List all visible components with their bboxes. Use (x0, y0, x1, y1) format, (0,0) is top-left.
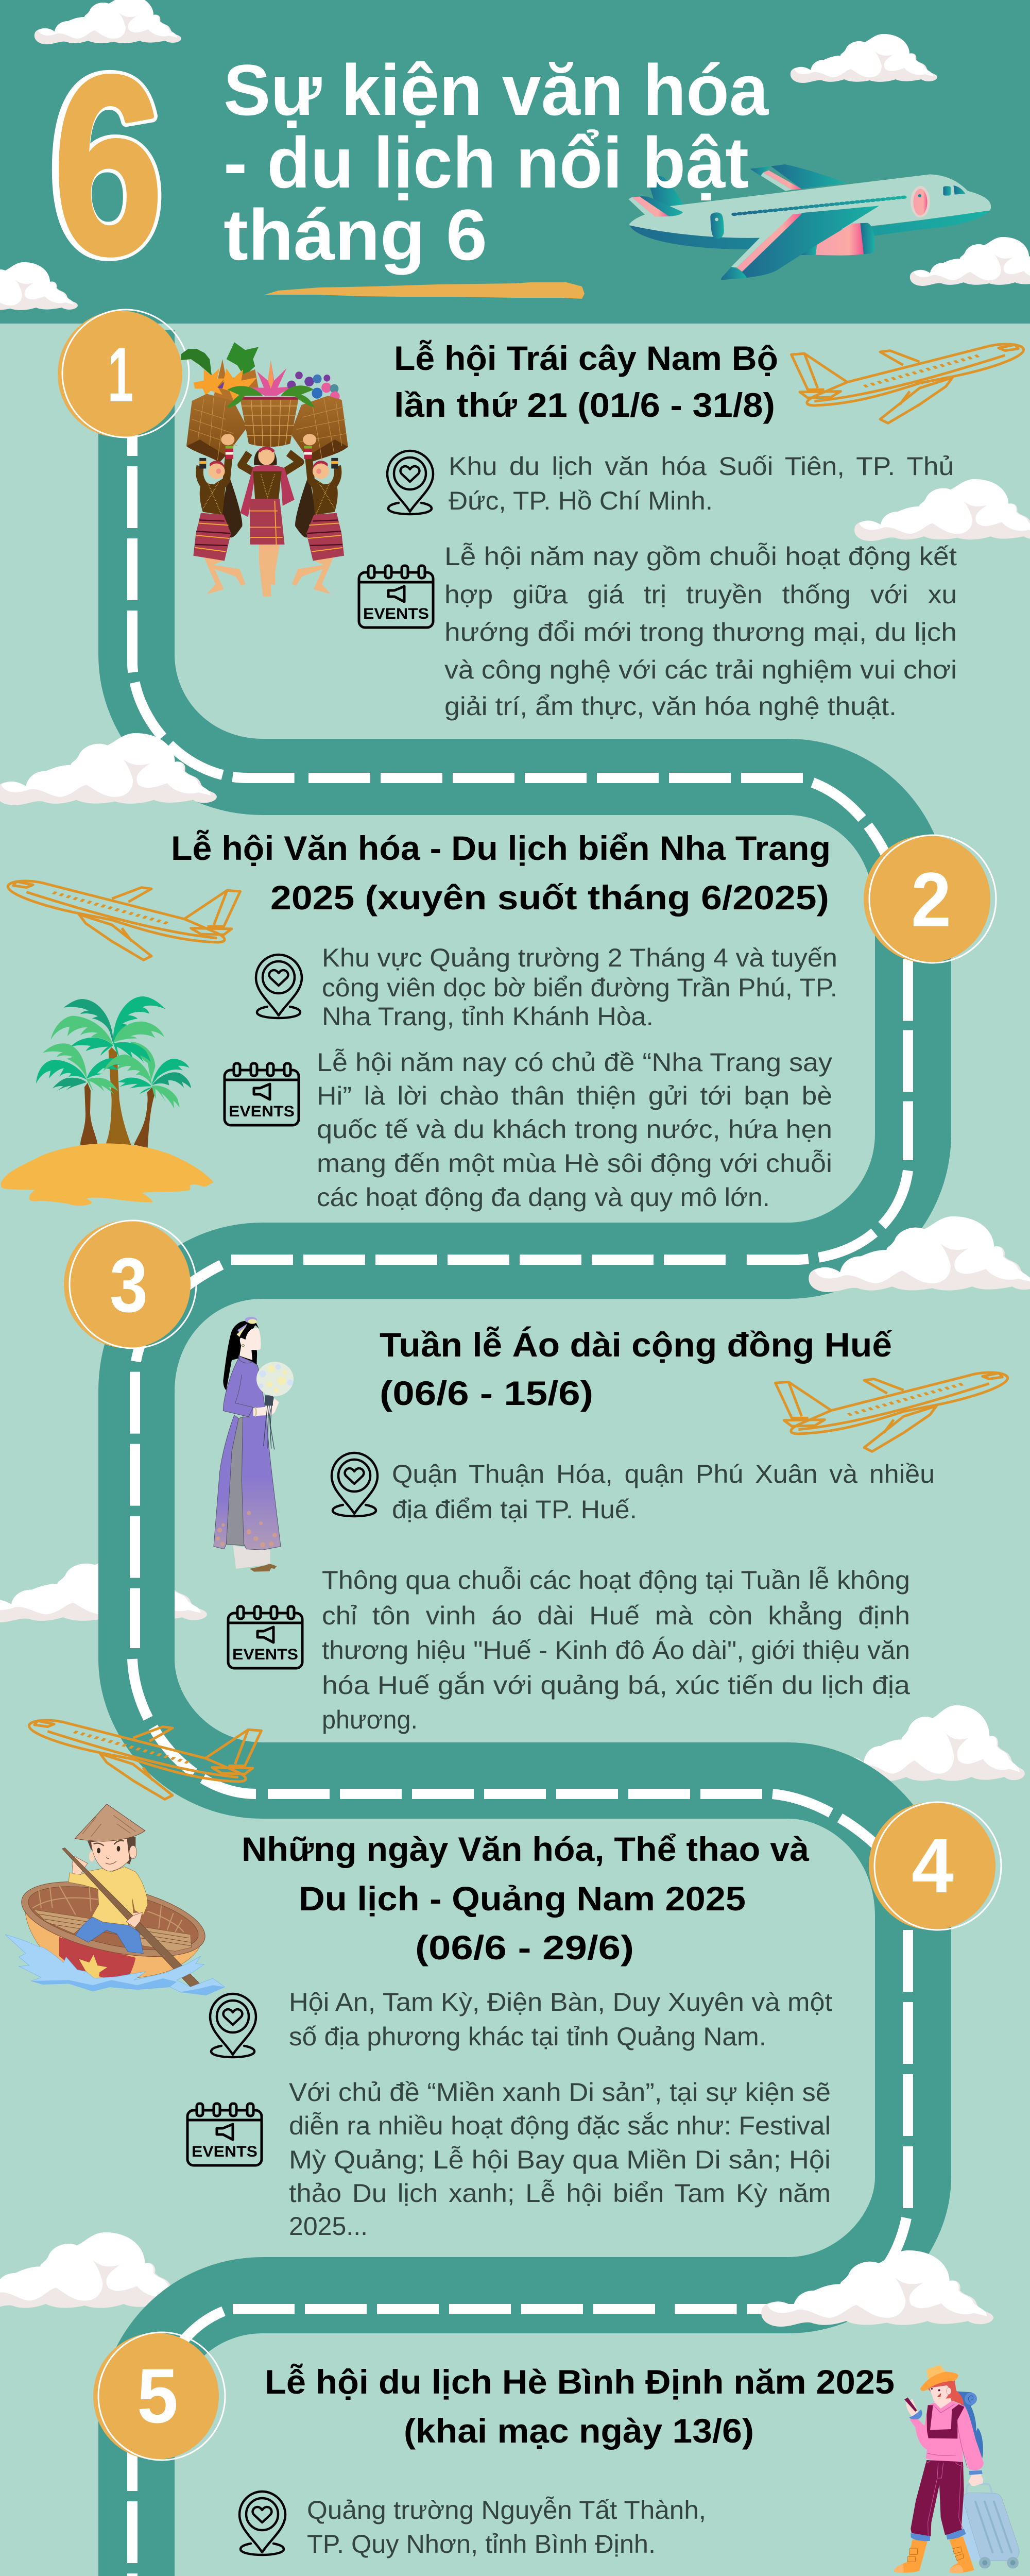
section 5 location text: TP. Quy Nhơn, tỉnh Bình Định. (307, 2530, 656, 2558)
section 1 location text: Khu du lịch văn hóa Suối Tiên, TP. Thủ (449, 452, 954, 481)
section 1 heading (394, 339, 778, 424)
step circle 5: 5 (137, 2352, 178, 2439)
cloud behind road, section 3 right (838, 1705, 1025, 1783)
section 1 location icon (387, 451, 433, 514)
airplane illustration (628, 164, 991, 280)
illustration: man rowing a basket boat (5, 1804, 225, 1995)
step circle 4 (869, 1802, 1001, 1930)
section 2 events icon (225, 1063, 299, 1125)
section 4 description: diễn ra nhiều hoạt động đặc sắc như: Festival (289, 2111, 831, 2140)
section 2 description: Hi” là lời chào thân thiện gửi tới bạn bè (317, 1081, 832, 1110)
section 2 description: các hoạt động đa dạng và quy mô lớn. (317, 1183, 770, 1212)
section 2 location text (322, 943, 837, 1031)
line plane 2 (8, 881, 240, 960)
section 3 description (322, 1566, 910, 1734)
line plane 3 (776, 1372, 1008, 1451)
section 1 heading: Lễ hội Trái cây Nam Bộ (394, 339, 778, 377)
section 5 location icon (239, 2492, 285, 2555)
illustration: three dancers carrying baskets (181, 342, 348, 597)
step circle 3: 3 (110, 1242, 148, 1328)
section 4 heading: Những ngày Văn hóa, Thể thao và (242, 1830, 809, 1868)
title underline brush (265, 282, 585, 299)
section 5 location text (307, 2496, 706, 2558)
section 3 events icon: EVENTS (232, 1646, 298, 1663)
section 1 description: hướng đổi mới trong thương mại, du lịch (444, 618, 957, 647)
section 3 location icon (332, 1453, 377, 1516)
section 4 location icon (210, 1994, 256, 2057)
section 4 events icon (187, 2104, 262, 2165)
title: Sự kiện văn hóa (224, 49, 769, 130)
title: - du lịch nổi bật (224, 122, 749, 203)
section 1 description: hợp giữa giá trị truyền thống với xu (444, 580, 957, 609)
road centre dashes (132, 394, 908, 2576)
section 2 description: mang đến một mùa Hè sôi động với chuỗi (317, 1149, 832, 1178)
step circle 2 (864, 835, 996, 963)
section 1 description: và công nghệ với các trải nghiệm vui chơi (444, 655, 957, 684)
section 5 heading: Lễ hội du lịch Hè Bình Định năm 2025 (265, 2363, 895, 2401)
step circle 3 (64, 1221, 196, 1348)
section 4 heading (242, 1830, 809, 1967)
section 4 location text: Hội An, Tam Kỳ, Điện Bàn, Duy Xuyên và một (289, 1988, 832, 2016)
section 1 events icon (359, 566, 433, 628)
section 2 heading (171, 829, 831, 917)
section 2 description: Lễ hội năm nay có chủ đề “Nha Trang say (317, 1048, 832, 1077)
section 3 location text: địa điểm tại TP. Huế. (392, 1495, 637, 1524)
step circle 5 (93, 2332, 225, 2460)
step circle 2: 2 (911, 856, 951, 943)
section 4 description: Mỳ Quảng; Lễ hội Bay qua Miền Di sản; Hội (289, 2145, 831, 2174)
section 4 description: Với chủ đề “Miền xanh Di sản”, tại sự kiện sẽ (289, 2078, 831, 2107)
section 4 description: 2025... (289, 2212, 368, 2241)
section 5 location text: Quảng trường Nguyễn Tất Thành, (307, 2496, 706, 2524)
section 2 events icon: EVENTS (229, 1103, 295, 1120)
section 3 description: thương hiệu "Huế - Kinh đô Áo dài", giới thiệu văn (322, 1636, 910, 1665)
section 2 location text: Nha Trang, tỉnh Khánh Hòa. (322, 1002, 654, 1031)
big number 6: 6 (49, 24, 164, 306)
step circle 1 (58, 310, 189, 437)
section 3 heading (380, 1326, 892, 1412)
line plane 1 (792, 344, 1024, 423)
section 4 heading: (06/6 - 29/6) (415, 1928, 634, 1967)
section 3 location text (392, 1460, 935, 1524)
section 4 description: thảo Du lịch xanh; Lễ hội biển Tam Kỳ năm (289, 2179, 831, 2208)
section 2 location text: công viên dọc bờ biển đường Trần Phú, TP. (322, 973, 837, 1002)
section 3 location text: Quận Thuận Hóa, quận Phú Xuân và nhiều (392, 1460, 935, 1488)
section 4 location text: số địa phương khác tại tỉnh Quảng Nam. (289, 2022, 766, 2051)
section 2 location icon (256, 955, 302, 1018)
section 5 heading (265, 2363, 895, 2450)
big number 6: 6 (54, 24, 163, 306)
title: tháng 6 (224, 194, 487, 275)
section 3 heading: (06/6 - 15/6) (380, 1374, 593, 1412)
section 3 description: hóa Huế gắn với quảng bá, xúc tiến du lịch địa (322, 1671, 910, 1700)
section 2 heading: Lễ hội Văn hóa - Du lịch biển Nha Trang (171, 829, 831, 867)
section 4 events icon: EVENTS (192, 2143, 258, 2160)
section 3 description: chỉ tôn vinh áo dài Huế mà còn khẳng định (322, 1601, 910, 1630)
section 1 heading: lần thứ 21 (01/6 - 31/8) (394, 386, 775, 424)
illustration: woman in purple ao dai (214, 1317, 294, 1572)
section 4 heading: Du lịch - Quảng Nam 2025 (299, 1879, 746, 1918)
step circle 1: 1 (108, 331, 133, 418)
section 1 description: giải trí, ẩm thực, văn hóa nghệ thuật. (444, 692, 897, 721)
illustration: palm trees on a sand island (1, 996, 214, 1206)
section 1 description: Lễ hội năm nay gồm chuỗi hoạt động kết (444, 542, 957, 571)
illustration: girl traveler with backpack and suitcase (894, 2365, 1019, 2573)
cloud behind road, section 3 left (0, 1553, 207, 1622)
section 3 description: Thông qua chuỗi các hoạt động tại Tuần lễ không (322, 1566, 910, 1595)
header band (0, 0, 1030, 324)
road (136, 330, 913, 2576)
section 1 description (444, 542, 957, 721)
section 1 location text (449, 452, 954, 515)
section 2 description (317, 1048, 832, 1212)
section 1 events icon: EVENTS (363, 605, 429, 622)
section 3 events icon (228, 1606, 302, 1668)
section 4 description (289, 2078, 831, 2241)
cloud behind road, section 5 left (0, 2232, 187, 2310)
section 2 heading: 2025 (xuyên suốt tháng 6/2025) (270, 878, 829, 917)
section 4 location text (289, 1988, 832, 2051)
section 2 location text: Khu vực Quảng trường 2 Tháng 4 và tuyến (322, 943, 837, 972)
section 3 heading: Tuần lễ Áo dài cộng đồng Huế (380, 1326, 892, 1364)
title (224, 49, 769, 275)
section 3 description: phương. (322, 1705, 418, 1734)
section 1 location text: Đức, TP. Hồ Chí Minh. (449, 486, 713, 515)
section 2 description: quốc tế và du khách trong nước, hứa hẹn (317, 1115, 832, 1144)
line plane 4 (29, 1720, 261, 1799)
section 5 heading: (khai mạc ngày 13/6) (404, 2412, 754, 2450)
step circle 4: 4 (912, 1822, 954, 1909)
